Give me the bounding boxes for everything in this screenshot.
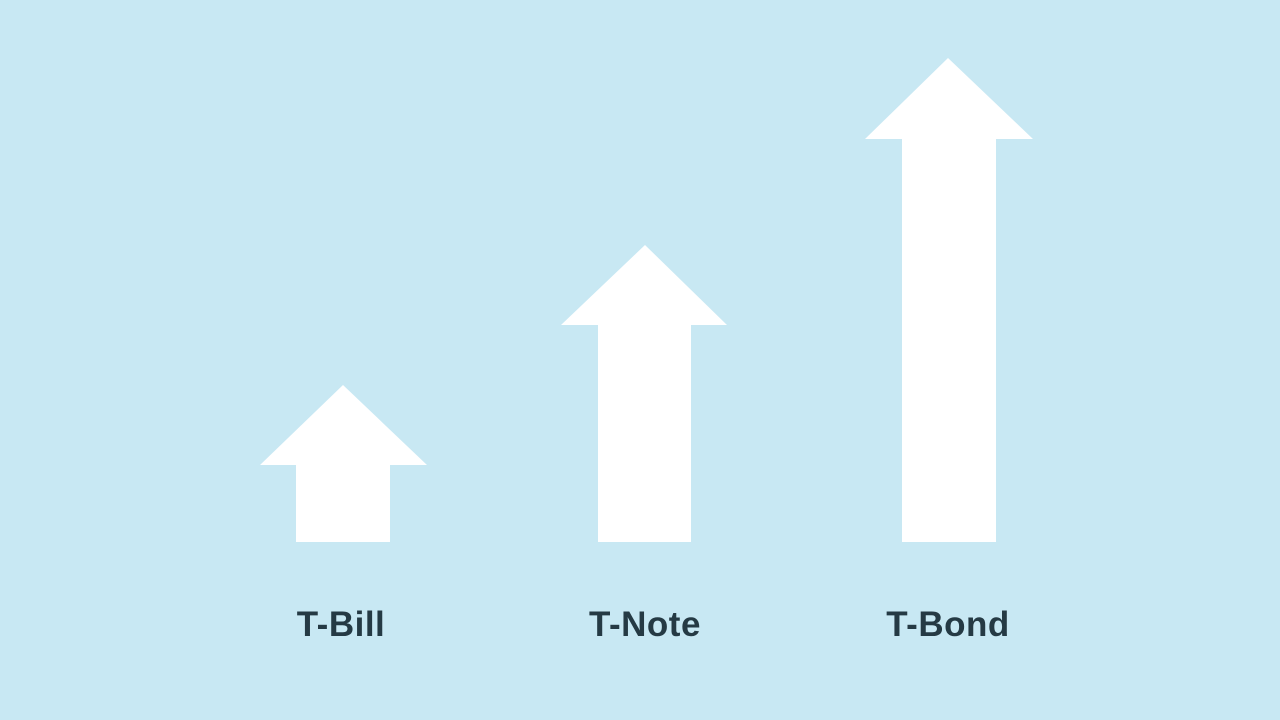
label: T-Bond: T-Bond <box>886 605 1010 644</box>
label: T-Note: T-Note <box>589 605 701 644</box>
icon: arrow T-Bill <box>260 385 427 542</box>
icon: arrow T-Bond <box>865 58 1033 542</box>
label: T-Bill: T-Bill <box>297 605 385 644</box>
icon: arrow T-Note <box>561 245 727 542</box>
